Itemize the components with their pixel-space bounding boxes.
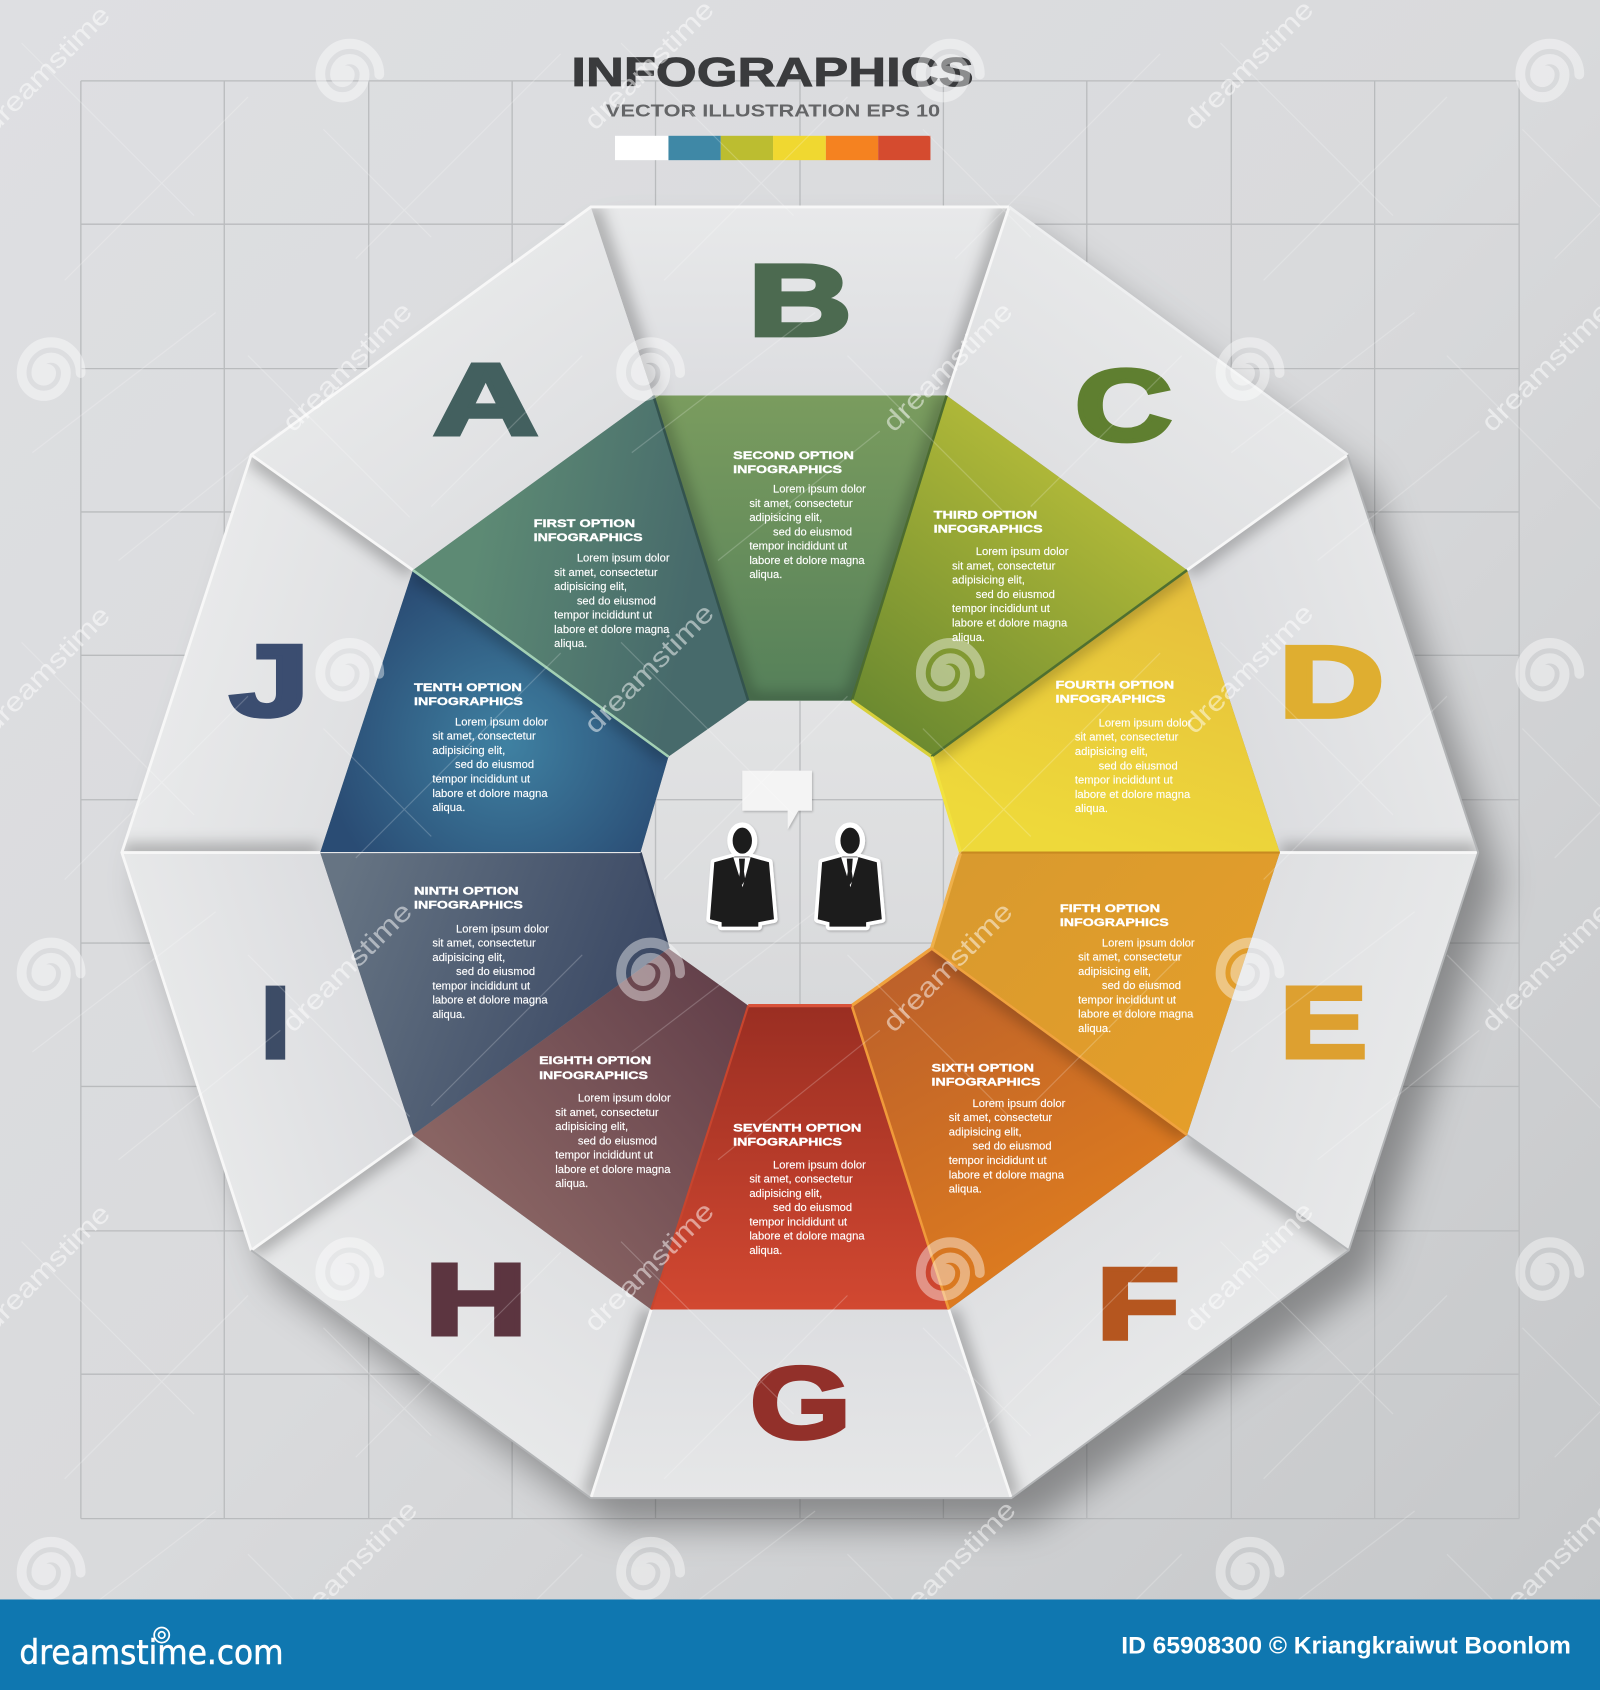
option 5 text: adipisicing elit, bbox=[1078, 966, 1151, 978]
option 7 text: sed do eiusmod bbox=[773, 1202, 852, 1214]
option 8 text: EIGHTH OPTION bbox=[539, 1055, 651, 1067]
option 6 text: INFOGRAPHICS bbox=[932, 1076, 1041, 1088]
option 4 text bbox=[1056, 680, 1192, 815]
option panel 4 bbox=[932, 570, 1280, 853]
option 2 text: aliqua. bbox=[749, 569, 782, 581]
option 8 text: labore et dolore magna bbox=[555, 1164, 671, 1176]
option 7 text: labore et dolore magna bbox=[749, 1231, 865, 1243]
option 9 text: aliqua. bbox=[432, 1009, 465, 1021]
outer segment C bbox=[947, 207, 1348, 570]
option 5 text: labore et dolore magna bbox=[1078, 1009, 1194, 1021]
icon: logo spiral bbox=[154, 1627, 169, 1643]
watermark text: dreamstime bbox=[1480, 1494, 1600, 1636]
colour legend bar bbox=[615, 136, 930, 160]
option 5 text: aliqua. bbox=[1078, 1023, 1111, 1035]
option 5 text: INFOGRAPHICS bbox=[1060, 917, 1169, 929]
footer banner bbox=[0, 1599, 1600, 1690]
option panel 3 bbox=[852, 396, 1187, 757]
option 5 text: sed do eiusmod bbox=[1102, 980, 1181, 992]
option 10 text: TENTH OPTION bbox=[414, 682, 522, 694]
option panel 10 bbox=[320, 570, 668, 853]
outer segment G bbox=[591, 1310, 1011, 1498]
option 7 text: INFOGRAPHICS bbox=[733, 1137, 843, 1149]
option 2 text bbox=[733, 450, 866, 581]
option 4 text: aliqua. bbox=[1075, 803, 1108, 815]
grid bbox=[81, 81, 1519, 1519]
letter F: F bbox=[1096, 1248, 1180, 1361]
option 6 text: adipisicing elit, bbox=[949, 1126, 1022, 1138]
option 3 text: sed do eiusmod bbox=[976, 589, 1055, 601]
icon: right businessman bbox=[818, 825, 882, 927]
image credit: ID 65908300 © Kriangkraiwut Boonlom bbox=[1121, 1633, 1571, 1659]
option 10 text: adipisicing elit, bbox=[432, 745, 505, 757]
option 2 text: Lorem ipsum dolor bbox=[773, 484, 866, 496]
option 1 text: INFOGRAPHICS bbox=[534, 532, 643, 544]
option 7 text bbox=[733, 1123, 866, 1257]
option 9 text bbox=[414, 886, 549, 1021]
option 6 text: aliqua. bbox=[949, 1184, 982, 1196]
option 7 text: sit amet, consectetur bbox=[749, 1174, 853, 1186]
letter J: J bbox=[230, 625, 309, 738]
option 2 text: adipisicing elit, bbox=[749, 512, 822, 524]
option 9 text: sit amet, consectetur bbox=[432, 938, 536, 950]
outer segment I bbox=[122, 853, 413, 1250]
outer segment E bbox=[1187, 853, 1478, 1250]
letter G: G bbox=[750, 1347, 851, 1460]
option 8 text bbox=[539, 1055, 671, 1190]
option 8 text: aliqua. bbox=[555, 1178, 588, 1190]
brand logo: dreamstime.com bbox=[19, 1633, 284, 1672]
option 1 text: aliqua. bbox=[554, 638, 587, 650]
icon: speech bubble bbox=[742, 771, 812, 829]
title: INFOGRAPHICS bbox=[571, 49, 974, 95]
option 7 text: adipisicing elit, bbox=[749, 1188, 822, 1200]
option 2 text: SECOND OPTION bbox=[733, 450, 854, 462]
option 10 text bbox=[414, 682, 548, 814]
option 6 text: sed do eiusmod bbox=[973, 1141, 1052, 1153]
option 10 text: tempor incididunt ut bbox=[432, 773, 531, 785]
option 8 text: sed do eiusmod bbox=[578, 1135, 657, 1147]
option 4 text: tempor incididunt ut bbox=[1075, 775, 1174, 787]
option panel 9 bbox=[320, 853, 668, 1135]
option 6 text: SIXTH OPTION bbox=[932, 1062, 1034, 1074]
watermark text: dreamstime bbox=[1475, 896, 1600, 1038]
subtitle: VECTOR ILLUSTRATION EPS 10 bbox=[606, 100, 940, 120]
option panel 7 bbox=[651, 1006, 949, 1310]
option 5 text: Lorem ipsum dolor bbox=[1102, 937, 1195, 949]
icon: left businessman bbox=[710, 825, 774, 927]
watermark text: dreamstime bbox=[282, 1494, 423, 1636]
option 5 text bbox=[1060, 903, 1195, 1035]
option 7 text: tempor incididunt ut bbox=[749, 1216, 848, 1228]
option 3 text: aliqua. bbox=[952, 632, 985, 644]
option 6 text: tempor incididunt ut bbox=[949, 1155, 1047, 1167]
option 4 text: sed do eiusmod bbox=[1099, 760, 1178, 772]
option 9 text: sed do eiusmod bbox=[456, 966, 535, 978]
option 9 text: adipisicing elit, bbox=[432, 952, 505, 964]
option 8 text: Lorem ipsum dolor bbox=[578, 1093, 671, 1105]
option 1 text: adipisicing elit, bbox=[554, 581, 627, 593]
option 8 text: tempor incididunt ut bbox=[555, 1150, 654, 1162]
watermark text: dreamstime bbox=[877, 896, 1018, 1038]
option 3 text: Lorem ipsum dolor bbox=[976, 546, 1069, 558]
option 1 text: labore et dolore magna bbox=[554, 624, 670, 636]
option 3 text: tempor incididunt ut bbox=[952, 603, 1051, 615]
option 10 text: INFOGRAPHICS bbox=[414, 696, 523, 708]
option 9 text: INFOGRAPHICS bbox=[414, 900, 523, 912]
letter I: I bbox=[261, 966, 290, 1079]
option 4 text: labore et dolore magna bbox=[1075, 789, 1191, 801]
option 4 text: adipisicing elit, bbox=[1075, 746, 1148, 758]
option 9 text: NINTH OPTION bbox=[414, 886, 519, 898]
watermark text: dreamstime bbox=[1178, 598, 1319, 739]
letter D: D bbox=[1279, 626, 1384, 739]
option 10 text: labore et dolore magna bbox=[432, 788, 548, 800]
option 2 text: INFOGRAPHICS bbox=[733, 464, 843, 476]
option 5 text: FIFTH OPTION bbox=[1060, 903, 1160, 915]
option 10 text: aliqua. bbox=[432, 802, 465, 814]
outer segment H bbox=[251, 1135, 651, 1498]
option 2 text: labore et dolore magna bbox=[749, 555, 865, 567]
outer segment B bbox=[591, 207, 1009, 396]
option 1 text: sit amet, consectetur bbox=[554, 567, 658, 579]
watermark text: dreamstime bbox=[578, 0, 720, 136]
option 8 text: sit amet, consectetur bbox=[555, 1107, 659, 1119]
option 6 text bbox=[932, 1062, 1066, 1196]
option 10 text: Lorem ipsum dolor bbox=[455, 716, 548, 728]
watermark text: dreamstime bbox=[1178, 0, 1319, 136]
option 2 text: sit amet, consectetur bbox=[749, 498, 853, 510]
letter C: C bbox=[1075, 349, 1172, 462]
watermark text: dreamstime bbox=[276, 296, 418, 438]
option 6 text: labore et dolore magna bbox=[949, 1169, 1065, 1181]
option 4 text: INFOGRAPHICS bbox=[1056, 694, 1166, 706]
letter E: E bbox=[1280, 966, 1367, 1079]
option 1 text: sed do eiusmod bbox=[577, 595, 656, 607]
letter H: H bbox=[425, 1243, 527, 1356]
option 1 text bbox=[534, 518, 670, 650]
option 1 text: tempor incididunt ut bbox=[554, 610, 653, 622]
watermark text: dreamstime bbox=[1178, 1196, 1319, 1337]
watermark text: dreamstime bbox=[880, 1494, 1022, 1636]
option 2 text: sed do eiusmod bbox=[773, 526, 852, 538]
option 5 text: sit amet, consectetur bbox=[1078, 952, 1182, 964]
option 3 text: INFOGRAPHICS bbox=[934, 523, 1043, 535]
option 1 text: Lorem ipsum dolor bbox=[577, 553, 670, 565]
letter B: B bbox=[748, 244, 852, 357]
letter A: A bbox=[433, 343, 538, 456]
option 5 text: tempor incididunt ut bbox=[1078, 994, 1177, 1006]
option 3 text: THIRD OPTION bbox=[934, 509, 1037, 521]
centre hub bbox=[636, 690, 965, 1013]
option 3 text: labore et dolore magna bbox=[952, 617, 1068, 629]
outer segment D bbox=[1187, 455, 1478, 853]
watermark text: dreamstime bbox=[276, 896, 418, 1038]
option 4 text: Lorem ipsum dolor bbox=[1099, 717, 1192, 729]
outer segment A bbox=[251, 207, 653, 570]
option 7 text: aliqua. bbox=[749, 1245, 782, 1257]
option panel 5 bbox=[932, 853, 1280, 1135]
decagon drop shadow bbox=[143, 235, 1500, 1526]
option 9 text: Lorem ipsum dolor bbox=[456, 923, 549, 935]
option panel 1 bbox=[413, 396, 748, 757]
option 3 text bbox=[934, 509, 1069, 644]
option 8 text: adipisicing elit, bbox=[555, 1121, 628, 1133]
option 1 text: FIRST OPTION bbox=[534, 518, 635, 530]
option 9 text: labore et dolore magna bbox=[432, 995, 548, 1007]
outer segment J bbox=[122, 455, 413, 853]
outer segment F bbox=[949, 1135, 1349, 1498]
option 2 text: tempor incididunt ut bbox=[749, 541, 848, 553]
watermark text: dreamstime bbox=[578, 598, 720, 739]
option panel 2 bbox=[653, 396, 947, 701]
watermark text: dreamstime bbox=[1475, 296, 1600, 438]
option 3 text: sit amet, consectetur bbox=[952, 560, 1056, 572]
option 7 text: Lorem ipsum dolor bbox=[773, 1159, 866, 1171]
option 10 text: sit amet, consectetur bbox=[432, 731, 536, 743]
option panel 8 bbox=[413, 948, 748, 1310]
option 4 text: sit amet, consectetur bbox=[1075, 732, 1179, 744]
option 7 text: SEVENTH OPTION bbox=[733, 1123, 861, 1135]
option 6 text: Lorem ipsum dolor bbox=[973, 1098, 1066, 1110]
option 6 text: sit amet, consectetur bbox=[949, 1112, 1052, 1124]
watermark text: dreamstime bbox=[578, 1196, 720, 1337]
watermark text: dreamstime bbox=[877, 296, 1018, 438]
option panel 6 bbox=[852, 948, 1187, 1310]
option 3 text: adipisicing elit, bbox=[952, 575, 1025, 587]
option 9 text: tempor incididunt ut bbox=[432, 980, 531, 992]
option 4 text: FOURTH OPTION bbox=[1056, 680, 1174, 692]
option 8 text: INFOGRAPHICS bbox=[539, 1070, 648, 1082]
option 10 text: sed do eiusmod bbox=[455, 759, 534, 771]
